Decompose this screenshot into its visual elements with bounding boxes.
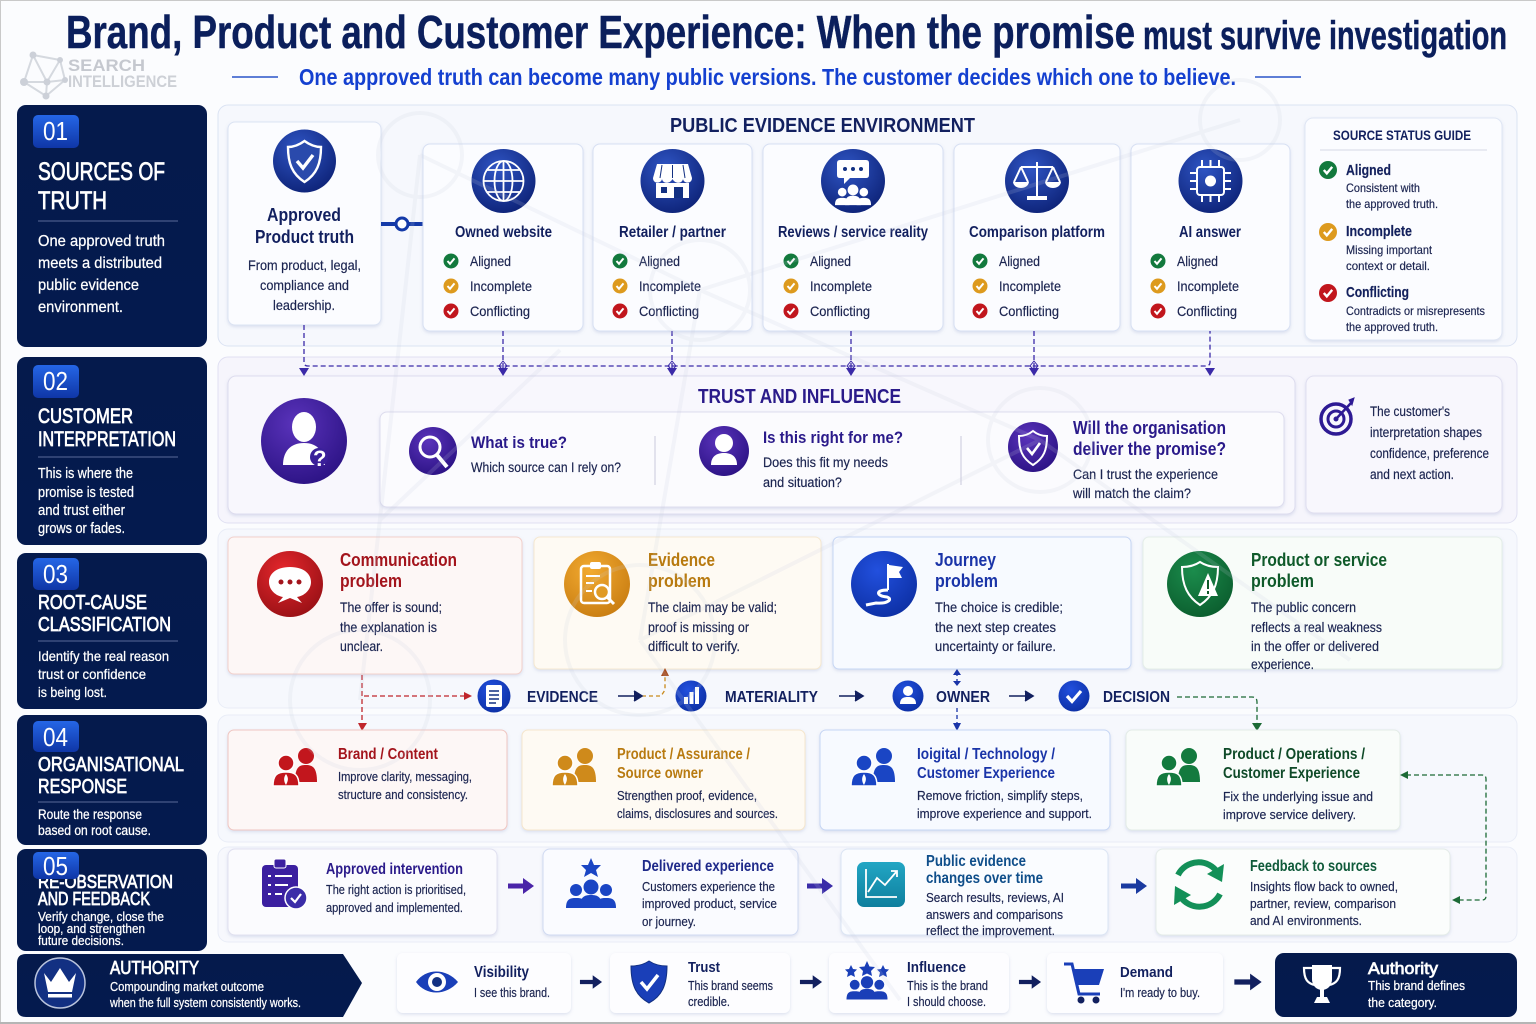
label: Owned website [455,224,552,241]
text: AUTHORITY [110,958,199,978]
text: I should choose. [907,995,986,1009]
badge 02: 02 [43,366,68,396]
text [926,853,1064,938]
question: is this right for me: Does this fit my needs [763,455,888,470]
title: Journey [935,550,996,570]
text: Fix the underlying issue and [1223,790,1373,804]
panel: 02 customer interpretation [17,357,207,545]
arrow [1009,691,1033,701]
panel: authority chevron [17,954,362,1017]
icon: clipboard magnifier [564,551,630,617]
badge 03: 03 [43,559,68,589]
panel: row 1 background [218,105,1517,346]
step: owner [892,680,990,712]
card: trust [610,953,790,1013]
status list: Incomplete [999,278,1061,294]
text: reflect the improvement. [926,924,1055,938]
logo: Search Intelligence: INTELLIGENCE [68,72,177,91]
card: approved intervention [228,849,497,935]
panel: 04 organisational response [17,715,207,845]
card: influence [829,953,1009,1013]
heading: re-observation and feedback [38,872,173,909]
description [38,466,134,537]
description: Identify the real reason [38,648,169,664]
description: The public concern [1251,599,1356,615]
title: problem [1251,571,1314,591]
callout: interpretation shapes confidence [1306,376,1502,513]
text: This brand defines [1368,978,1465,993]
text: Search results, reviews, AI [926,891,1064,905]
card: journey problem [833,537,1131,669]
icon: flag path [851,551,917,617]
card: brand / content [228,730,507,830]
text: confidence, preference [1370,446,1489,461]
text: structure and consistency. [338,788,468,802]
card: feedback to sources [1156,849,1450,935]
text [255,205,354,247]
text [1250,858,1398,928]
badge 05: 05 [43,851,68,881]
status list [612,253,701,319]
heading: root-cause classification: ROOT-CAUSE [38,592,147,614]
heading: re-observation and feedback: RE-OBSERVATION [38,872,173,892]
questions box [380,412,1284,507]
text: The customer's [1370,404,1450,419]
description [38,909,164,948]
description [1251,599,1382,672]
arrow [580,975,602,989]
text [917,746,1092,821]
step: decision [1058,680,1170,712]
text: Trust [688,959,720,976]
text: Visibility [474,964,529,981]
text: Delivered experience [642,858,774,875]
description: uncertainty or failure. [935,638,1056,654]
arrow: communication problem to evidence and brand [358,675,472,731]
status list: Aligned [810,253,851,269]
title: problem [340,571,402,591]
status list: Conflicting [1177,303,1237,319]
card: digital / technology / customer experience [820,730,1110,830]
text: Product truth [255,227,354,247]
question: what is true [409,427,621,475]
description [38,233,165,316]
question: will the organisation deliver [1008,418,1226,501]
heading: root-cause classification: CLASSIFICATION [38,614,171,636]
description: This is where the [38,466,133,482]
arrow: feedback loop [1400,771,1486,904]
status list [972,253,1061,319]
question: will the organisation deliver: will match the claim? [1072,486,1191,501]
text: Customers experience the [642,880,775,894]
card: visibility [397,953,571,1013]
arrow [508,878,534,894]
status list: Incomplete [639,278,701,294]
question: will the organisation deliver: Can I trust the experience [1073,467,1218,482]
status list [1150,253,1239,319]
arrow [800,975,822,989]
question: what is true: Which source can I rely on? [471,460,621,475]
panel: 01 sources of truth [17,105,207,347]
card: reviews / service reality [763,144,943,331]
icon: storefront [640,149,704,213]
card: delivered experience [543,849,798,935]
arrow [618,691,642,701]
icon: stars and team [845,961,889,999]
text [1368,959,1465,1010]
step: materiality: MATERIALITY [725,689,818,706]
icon: team [851,748,895,786]
entry: aligned: Aligned [1346,162,1391,179]
text: the category. [1368,995,1437,1010]
description [340,599,442,654]
status list: Aligned [639,253,680,269]
description: Route the response [38,807,142,822]
text: This is the brand [907,979,988,993]
text: Ioigital / Technology / [917,746,1056,763]
description: proof is missing or [648,619,749,635]
entry: aligned [1319,161,1438,211]
arrow: journey problem link [953,669,961,731]
logo: Search Intelligence [20,52,177,100]
text: approved and implemented. [326,901,463,915]
description: Verify change, close the [38,909,164,924]
icon: rising chart [857,862,905,907]
heading: re-observation and feedback: AND FEEDBACK [38,889,150,909]
description: The claim may be valid; [648,599,777,615]
icon: clipboard check [262,859,307,909]
title: Evidence [648,550,715,570]
icon: star and team [566,858,616,908]
entry: conflicting: Conflicting [1346,284,1409,301]
text: approved truth description: compliance and [260,277,349,293]
icon: eye [416,972,458,992]
icon: team [273,748,317,786]
text: Product / Operations / [1223,746,1366,763]
text: answers and comparisons [926,908,1063,922]
description: meets a distributed [38,255,162,272]
description [935,599,1063,654]
badge 04: 04 [43,722,68,752]
text: Source owner [617,765,703,782]
arrow [1234,974,1262,990]
status list: Conflicting [999,303,1059,319]
heading: sources of truth [38,158,165,215]
description [38,807,151,838]
heading: sources of truth: TRUTH [38,187,107,215]
text: improved product, service [642,897,777,911]
icon: shield check [273,130,336,192]
card: AI answer [1131,144,1290,331]
card: product / assurance / source owner [522,730,805,830]
text: claims, disclosures and sources. [617,807,778,821]
step: evidence: EVIDENCE [527,689,598,706]
description: The offer is sound; [340,599,442,615]
text [109,958,301,1010]
heading: sources of truth: SOURCES OF [38,158,165,186]
entry: incomplete: Incomplete [1346,223,1412,240]
entry: conflicting: the approved truth. [1346,320,1438,334]
badge 05 [33,851,79,881]
label: Comparison platform [969,224,1105,241]
icon: shield warning [1167,551,1233,617]
text: Customer Experience [1223,765,1360,782]
heading: public evidence environment: PUBLIC EVIDENCE ENVIRONMENT [670,115,975,137]
text: Demand [1120,964,1173,981]
icon: person with question [261,398,347,484]
title: Product or service [1251,550,1387,570]
icon: team [552,748,596,786]
entry: conflicting: Contradicts or misrepresents [1346,304,1485,318]
question: is this right for me: Is this right for me? [763,428,903,447]
logo: Search Intelligence: SEARCH [68,56,145,75]
question: is this right for me: and situation? [763,475,842,490]
text [617,746,778,821]
status list [444,253,532,319]
panel: 05 re-observation and feedback [17,849,207,951]
text: improve service delivery. [1223,808,1356,822]
panel: row 3 background [218,529,1517,708]
status list: Incomplete [470,278,532,294]
text: Compounding market outcome [110,979,264,994]
title: problem [648,571,711,591]
description: in the offer or delivered [1251,638,1379,654]
heading: root-cause classification [38,592,171,636]
text [1120,964,1200,1000]
arrow [839,691,863,701]
arrow: decision to product operations [1177,697,1262,731]
description [648,599,777,654]
heading: customer interpretation [38,405,176,451]
text [338,746,472,802]
text: The right action is prioritised, [326,883,466,897]
status list: Aligned [470,253,511,269]
card: communication problem [228,537,522,674]
heading: customer interpretation: INTERPRETATION [38,428,176,451]
icon: target [1321,398,1354,434]
heading: SOURCE STATUS GUIDE [1333,127,1471,143]
icon: scales [1005,149,1069,213]
label: Reviews / service reality [778,224,928,241]
description: the next step creates [935,619,1056,635]
card: public evidence changes over time [841,849,1108,938]
card: retailer / partner [593,144,752,331]
text: credible. [688,995,730,1009]
badge 03 [33,558,79,590]
badge 02 [33,365,79,398]
description: unclear. [340,638,383,654]
icon: speech bubble [257,551,323,617]
card: approved product truth [228,122,381,325]
description: experience. [1251,656,1314,672]
description: difficult to verify. [648,638,740,654]
description: loop, and strengthen [38,921,145,936]
question: will the organisation deliver: Will the organisation [1073,418,1226,438]
panel: source status guide [1305,118,1502,340]
background network watermark [290,80,1350,1000]
entry: incomplete: context or detail. [1346,259,1430,273]
title [1251,550,1387,591]
title [340,550,457,591]
step: materiality [676,680,818,712]
arrow [807,878,833,894]
icon: refresh cycle [1174,862,1224,907]
arrow: evidence problem link [642,668,669,696]
icon: trophy [1304,965,1340,1003]
text [907,959,988,1009]
card: demand [1047,953,1223,1013]
heading: trust and influence: TRUST AND INFLUENCE [698,386,901,408]
icon: shield [631,961,667,1003]
panel: row 4 background [218,715,1517,842]
text: approved truth description: leadership. [273,297,335,313]
icon: team [1156,748,1200,786]
description: One approved truth [38,233,165,250]
icon: person with question: ? [313,446,326,471]
status list: Incomplete [810,278,872,294]
text [326,861,466,915]
text: improve experience and support. [917,807,1092,821]
text: Product / Assurance / [617,746,751,763]
card: evidence problem [534,537,821,669]
card: owned website [423,144,583,331]
text: or journey. [642,915,696,929]
icon: crown [35,958,85,1008]
text [474,964,550,1000]
description: promise is tested [38,485,134,501]
status list: Incomplete [1177,278,1239,294]
text: I'm ready to buy. [1120,986,1200,1000]
status list [784,253,872,319]
text: interpretation shapes [1370,425,1482,440]
connector: approved truth to sources [381,218,423,230]
text: and AI environments. [1250,914,1362,928]
text: Approved intervention [326,861,463,878]
title: Brand, Product and Customer Experience: When the promise [66,6,1135,58]
step: evidence [478,680,598,712]
heading: organisational response: ORGANISATIONAL [38,753,184,776]
step: owner: OWNER [936,689,990,706]
description: public evidence [38,277,139,294]
status list: Conflicting [470,303,530,319]
text: Approved [267,205,341,225]
badge 01 [33,115,79,148]
card: product or service problem [1143,537,1502,672]
entry: incomplete: Missing important [1346,243,1433,257]
text: Public evidence [926,853,1026,870]
text: Improve clarity, messaging, [338,770,472,784]
card: trust and influence [228,376,1295,514]
text: Feedback to sources [1250,858,1377,875]
text: Authority [1368,959,1439,978]
title: problem [935,571,998,591]
text [688,959,773,1009]
text: partner, review, comparison [1250,897,1396,911]
question: will the organisation deliver: deliver the promise? [1073,439,1226,459]
panel: 03 root-cause classification [17,553,207,709]
description: trust or confidence [38,666,146,682]
text: when the full system consistently works. [109,995,301,1010]
text: Insights flow back to owned, [1250,880,1398,894]
entry: conflicting [1319,284,1485,334]
description: environment. [38,299,123,316]
panel: row 2 background [218,357,1517,523]
text: Strengthen proof, evidence, [617,789,757,803]
description: is being lost. [38,684,107,700]
text [1223,746,1373,822]
entry: aligned: the approved truth. [1346,197,1438,211]
text: Customer Experience [917,765,1055,782]
description: reflects a real weakness [1251,619,1382,635]
status list: Aligned [999,253,1040,269]
icon: AI chip [1178,149,1242,213]
card: product / operations / customer experience [1126,730,1400,830]
text: I see this brand. [474,986,550,1000]
heading: organisational response [38,753,184,798]
badge 01: 01 [43,116,68,146]
panel: row 5 background [218,847,1517,942]
entry: aligned: Consistent with [1346,181,1420,195]
status list: Conflicting [810,303,870,319]
status list: Conflicting [639,303,699,319]
text: Remove friction, simplify steps, [917,789,1083,803]
description: the explanation is [340,619,437,635]
arrow [1019,975,1041,989]
label: Retailer / partner [619,224,726,241]
text: Brand / Content [338,746,438,763]
question: what is true: What is true? [471,433,567,452]
icon: cart [1064,964,1104,1004]
title: Communication [340,550,457,570]
text: approved truth description [248,257,361,313]
text: This brand seems [688,979,773,993]
text: Influence [907,959,966,976]
subtitle: One approved truth can become many public versions. The customer decides which one to believe. [299,64,1236,90]
title [648,550,715,591]
status list: Aligned [1177,253,1218,269]
description: grows or fades. [38,521,125,537]
card: authority [1275,953,1517,1017]
question: is this right for me [699,426,903,490]
entry: incomplete [1319,223,1433,273]
text: approved truth description: From product, legal, [248,257,361,273]
text: changes over time [926,870,1043,887]
step: decision: DECISION [1103,689,1170,706]
icon: reviews [821,149,885,213]
description: future decisions. [38,933,124,948]
badge 04 [33,721,79,752]
text [1370,404,1489,482]
description: and trust either [38,503,125,519]
label: AI answer [1179,224,1241,241]
title [935,550,998,591]
description [38,648,169,700]
arrow [1121,878,1147,894]
description: based on root cause. [38,823,151,838]
arrows: sources flow into trust and influence [299,325,1215,376]
description: The choice is credible; [935,599,1063,615]
heading: customer interpretation: CUSTOMER [38,405,133,428]
heading: organisational response: RESPONSE [38,775,127,798]
icon: globe [472,149,536,213]
text: and next action. [1370,467,1454,482]
text [642,858,777,929]
card: comparison platform [954,144,1120,331]
flow: evidence materiality owner decision [358,668,1262,731]
